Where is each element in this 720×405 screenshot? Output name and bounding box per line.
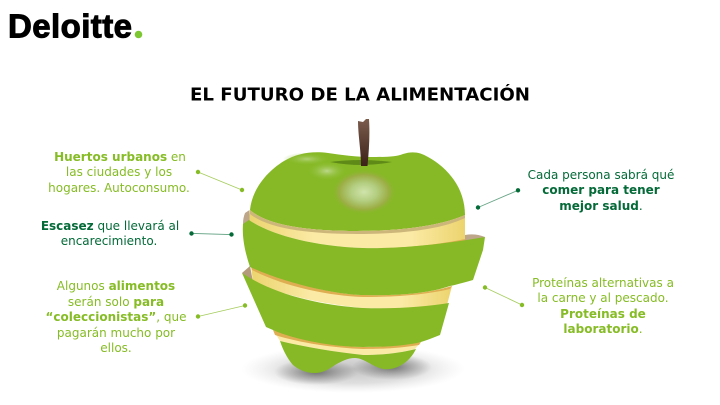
text block: escasez: encarecimiento. [61, 234, 157, 248]
text block: salud: comer para tener [542, 183, 660, 197]
text block: salud: mejor salud. [559, 199, 643, 213]
text block: salud [528, 168, 674, 213]
text block: proteínas [532, 276, 674, 336]
connector: salud [476, 188, 520, 210]
text block: escasez [41, 219, 179, 248]
title: EL FUTURO DE LA ALIMENTACIÓN [190, 84, 530, 106]
connector: coleccionistas [196, 303, 247, 319]
connector: escasez [189, 231, 234, 237]
flesh band 2 [242, 266, 452, 308]
text block: coleccionistas: serán solo para [68, 295, 164, 309]
text block: huertos urbanos: las ciudades y los [66, 165, 172, 179]
text block: huertos urbanos [48, 150, 190, 195]
text block: escasez: Escasez que llevará al [41, 219, 179, 233]
illustration: peeled green apple [241, 119, 485, 393]
text block: coleccionistas: pagarán mucho por [57, 326, 175, 340]
green peel band 1 [243, 220, 485, 295]
text block: salud: Cada persona sabrá qué [528, 168, 674, 182]
flesh band 3 [273, 330, 421, 355]
text block: proteínas: Proteínas alternativas a [532, 276, 674, 290]
green peel band 2 [242, 273, 449, 347]
connector: huertos [196, 170, 244, 192]
logo: Deloitte: Deloitte [8, 8, 132, 44]
apple shadow [241, 345, 465, 393]
text block: coleccionistas: “coleccionistas”, que [46, 310, 186, 324]
text block: proteínas: Proteínas de [560, 307, 646, 321]
apple base [280, 341, 416, 373]
text block: huertos urbanos: Huertos urbanos en [54, 150, 186, 164]
apple top [250, 152, 465, 231]
text block: proteínas: la carne y al pescado. [537, 291, 669, 305]
text block: proteínas: laboratorio. [563, 322, 643, 336]
stem [358, 119, 369, 166]
text block: huertos urbanos: hogares. Autoconsumo. [48, 181, 190, 195]
flesh band 1 [243, 210, 485, 248]
text block: coleccionistas [46, 279, 186, 355]
connector: proteínas [483, 285, 524, 307]
text block: coleccionistas: ellos. [100, 341, 132, 355]
text block: coleccionistas: Algunos alimentos [57, 279, 175, 293]
